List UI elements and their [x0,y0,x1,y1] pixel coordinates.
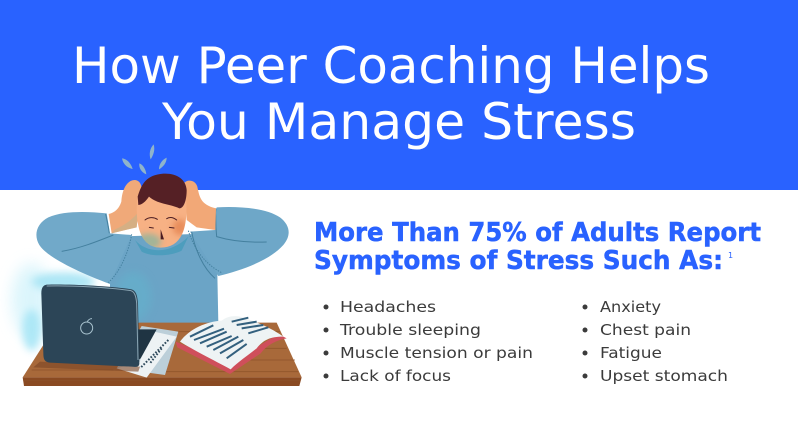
symptom list: right column: Fatigue [600,344,662,362]
symptom list: right column [582,298,728,385]
illustration: stressed man at desk [12,144,302,386]
header banner [0,0,798,190]
symptom list: left column: Lack of focus [340,367,451,385]
symptom list: right column: Chest pain [600,321,691,339]
head [136,174,187,250]
icon: sweat drops [122,144,167,174]
footnote marker: 1 [728,251,733,260]
papers [117,326,178,378]
symptom list: left column: Trouble sleeping [339,321,481,339]
open book [176,316,287,374]
symptom list: left column: Headaches [340,298,436,316]
heading [314,218,761,276]
hair [138,174,187,208]
title: How Peer Coaching Helps [72,37,710,95]
title [72,37,710,151]
face details [145,218,177,228]
symptom list: left column: Muscle tension or pain [340,344,533,362]
heading: Symptoms of Stress Such As: [314,246,723,276]
arms and hands [109,180,216,233]
symptom list: left column [324,298,533,385]
heading: More Than 75% of Adults Report [314,218,761,248]
logo [81,319,93,334]
symptom list: right column: Upset stomach [600,367,728,385]
laptop [33,285,157,372]
blue watercolor wash [12,263,95,351]
sweater seams [62,208,267,283]
symptom list: right column: Anxiety [600,298,661,316]
title: You Manage Stress [161,93,636,151]
book text lines [190,318,268,358]
sweater [36,207,289,323]
desk [23,323,302,386]
